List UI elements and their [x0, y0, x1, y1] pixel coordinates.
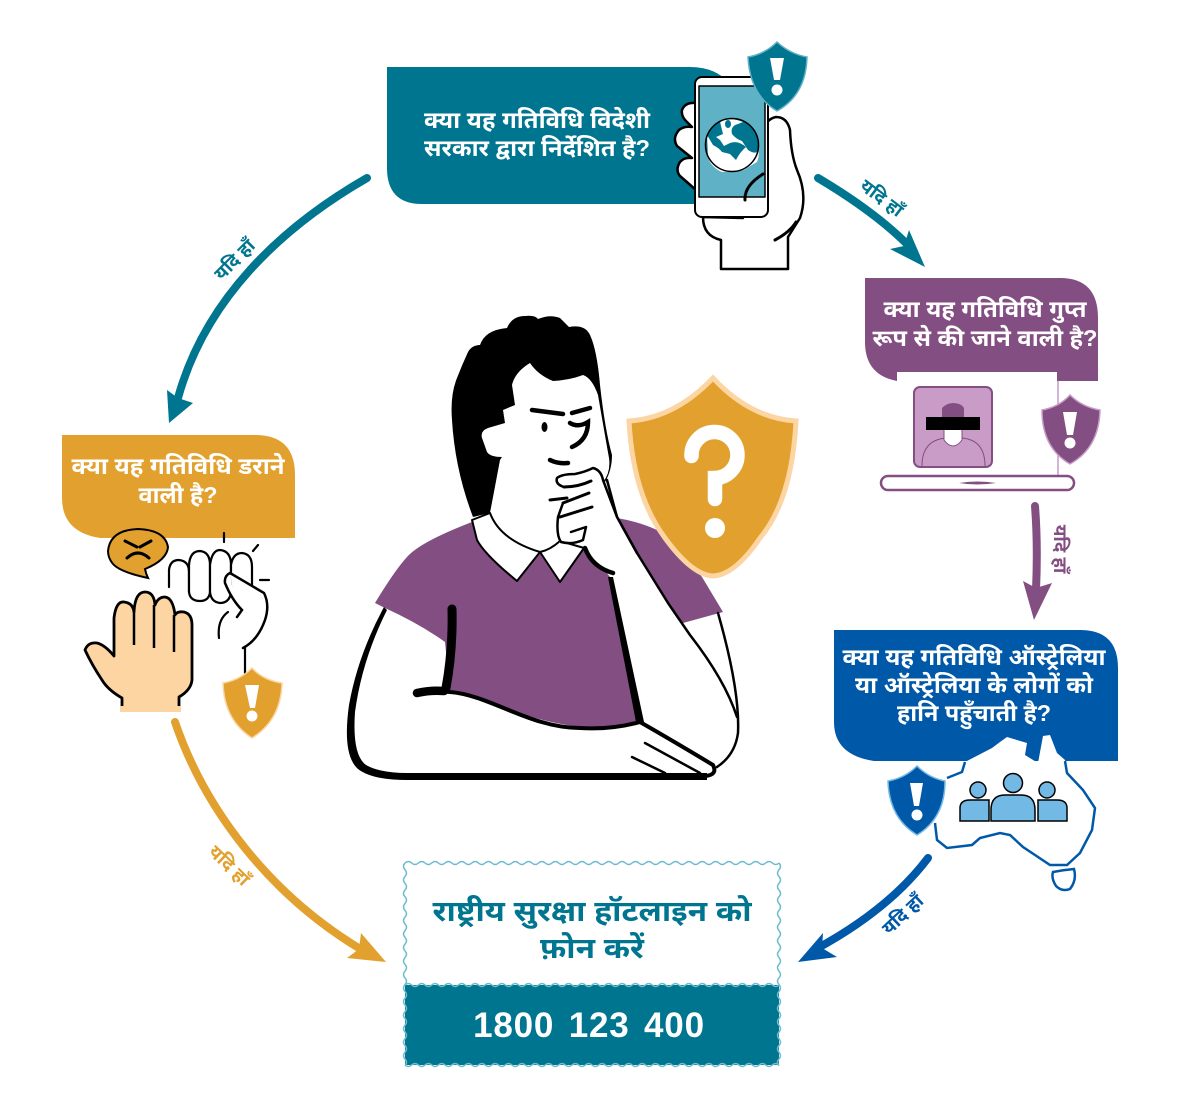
- question text: purple: [872, 296, 1098, 351]
- icon: angry face bubble: [108, 529, 168, 578]
- wavy border: [404, 862, 780, 1066]
- central figure: thinking man: [347, 316, 796, 780]
- shirt: [375, 518, 723, 729]
- question text: teal: [424, 107, 651, 161]
- body left and bottom outline: [347, 607, 707, 780]
- question text: blue: हानि पहुँचाती है?: [897, 700, 1051, 730]
- hair: [452, 316, 612, 517]
- speech box: teal: [387, 67, 730, 204]
- arrow: blue to hotline: [798, 858, 928, 962]
- question text: teal: सरकार द्वारा निर्देशित है?: [424, 135, 650, 161]
- arrow: teal left arc: [167, 178, 367, 423]
- body and arms: [349, 560, 738, 776]
- body outline: [417, 480, 738, 776]
- panel: hotline call to action: [404, 862, 780, 1066]
- icon: shield alert orange: [223, 668, 282, 738]
- icon: laptop with masked person: [881, 372, 1074, 490]
- icon: clenched fist: [169, 533, 269, 673]
- hotline heading: फ़ोन करें: [540, 932, 645, 965]
- shield with question mark: [629, 378, 796, 576]
- question text: blue: क्या यह गतिविधि ऑस्ट्रेलिया: [842, 644, 1107, 671]
- speech box: purple: [865, 278, 1098, 381]
- panel: covert question: [865, 278, 1100, 490]
- icon: shield alert blue: [888, 766, 945, 835]
- speech box: blue: [834, 630, 1118, 761]
- question text: orange: वाली है?: [138, 482, 218, 508]
- arrow: purple down: [1023, 506, 1052, 620]
- phone number: 1800 123 400: [473, 1006, 705, 1045]
- question text: blue: [842, 644, 1107, 730]
- arrow: orange to hotline: [175, 722, 386, 962]
- facial features: [532, 408, 590, 463]
- arrow label: purple: यदि हाँ: [1050, 525, 1072, 574]
- torso edge line: [608, 577, 644, 722]
- icon: shield alert purple: [1042, 395, 1100, 464]
- arrow label: left teal: यदि हाँ: [209, 233, 260, 284]
- hand on chin: [550, 468, 637, 573]
- icon: hand holding phone: [675, 77, 803, 269]
- arrow: teal to purple: [818, 178, 925, 267]
- question text: teal: क्या यह गतिविधि विदेशी: [424, 107, 651, 133]
- hotline heading: राष्ट्रीय सुरक्षा हॉटलाइन को: [432, 895, 752, 929]
- panel: threatening question: [62, 435, 295, 738]
- forearm fill: [585, 480, 700, 722]
- question text: blue: या ऑस्ट्रेलिया के लोगों को: [855, 672, 1094, 699]
- icon: raised hand: [85, 592, 192, 712]
- question text: orange: क्या यह गतिविधि डराने: [72, 453, 285, 479]
- icon: shield alert teal: [748, 42, 807, 111]
- panel: foreign government question: [387, 42, 807, 269]
- panel: harm to Australia question: [834, 630, 1118, 890]
- arrow label: blue: यदि हाँ: [877, 889, 928, 939]
- hotline heading: [432, 895, 752, 965]
- face: [482, 363, 609, 552]
- question text: purple: क्या यह गतिविधि गुप्त: [884, 296, 1087, 323]
- collar: [472, 513, 584, 582]
- speech box: orange: [62, 435, 295, 538]
- question text: orange: [72, 453, 285, 508]
- phone number band: [405, 985, 779, 1065]
- arrow label: orange: यदि हाँ: [205, 840, 256, 890]
- arrow label: teal right: यदि हाँ: [856, 174, 909, 221]
- question text: purple: रूप से की जाने वाली है?: [872, 325, 1098, 351]
- icon: map of Australia: [935, 735, 1095, 890]
- icon: people group: [960, 774, 1067, 821]
